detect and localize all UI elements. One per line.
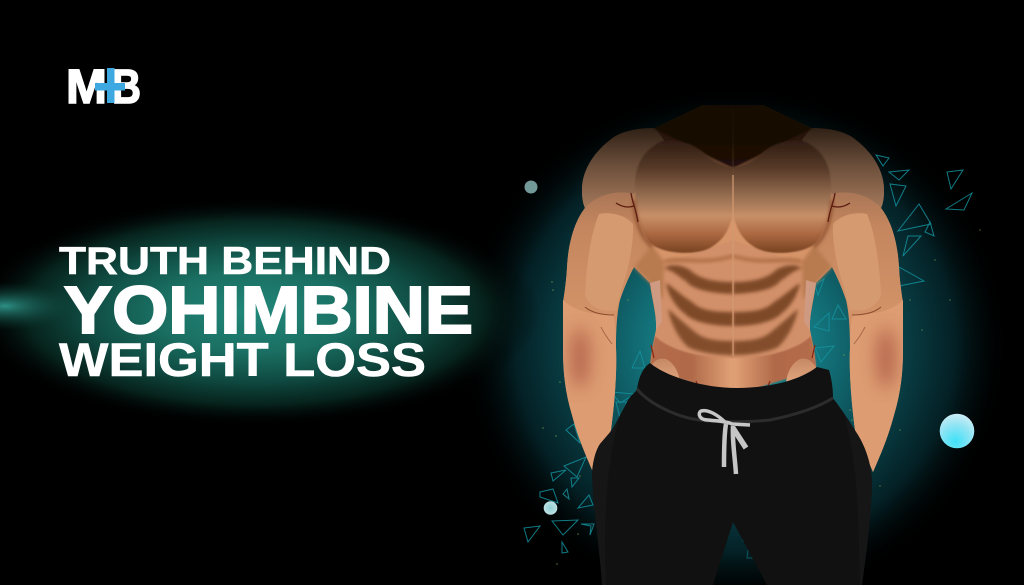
abdominal centre line	[732, 175, 734, 356]
background glow behind title	[0, 197, 540, 427]
drawstring	[699, 411, 750, 474]
left lens flare	[0, 280, 85, 332]
pants body	[592, 363, 872, 585]
title line: yohimbine: YOHIMBINE	[64, 273, 473, 348]
muscular torso figure	[555, 105, 911, 480]
title	[59, 240, 473, 386]
scattered particles	[542, 229, 981, 565]
black sweatpants	[592, 363, 872, 585]
icon: small sphere lower left	[544, 501, 557, 515]
waistband stitch	[637, 389, 833, 422]
logo: M	[66, 61, 107, 114]
left half of body	[555, 105, 733, 480]
logo: B	[112, 61, 141, 114]
icon: small sphere upper left	[524, 180, 538, 194]
background glow behind body	[460, 85, 1010, 585]
pocket shading	[844, 415, 872, 585]
right half of body	[733, 105, 911, 480]
floating triangles and particles	[524, 155, 972, 558]
title line: weight loss: WEIGHT LOSS	[59, 333, 426, 386]
title line: truth behind: TRUTH BEHIND	[59, 240, 391, 283]
logo	[66, 61, 141, 114]
icon: large glowing sphere	[940, 414, 974, 448]
